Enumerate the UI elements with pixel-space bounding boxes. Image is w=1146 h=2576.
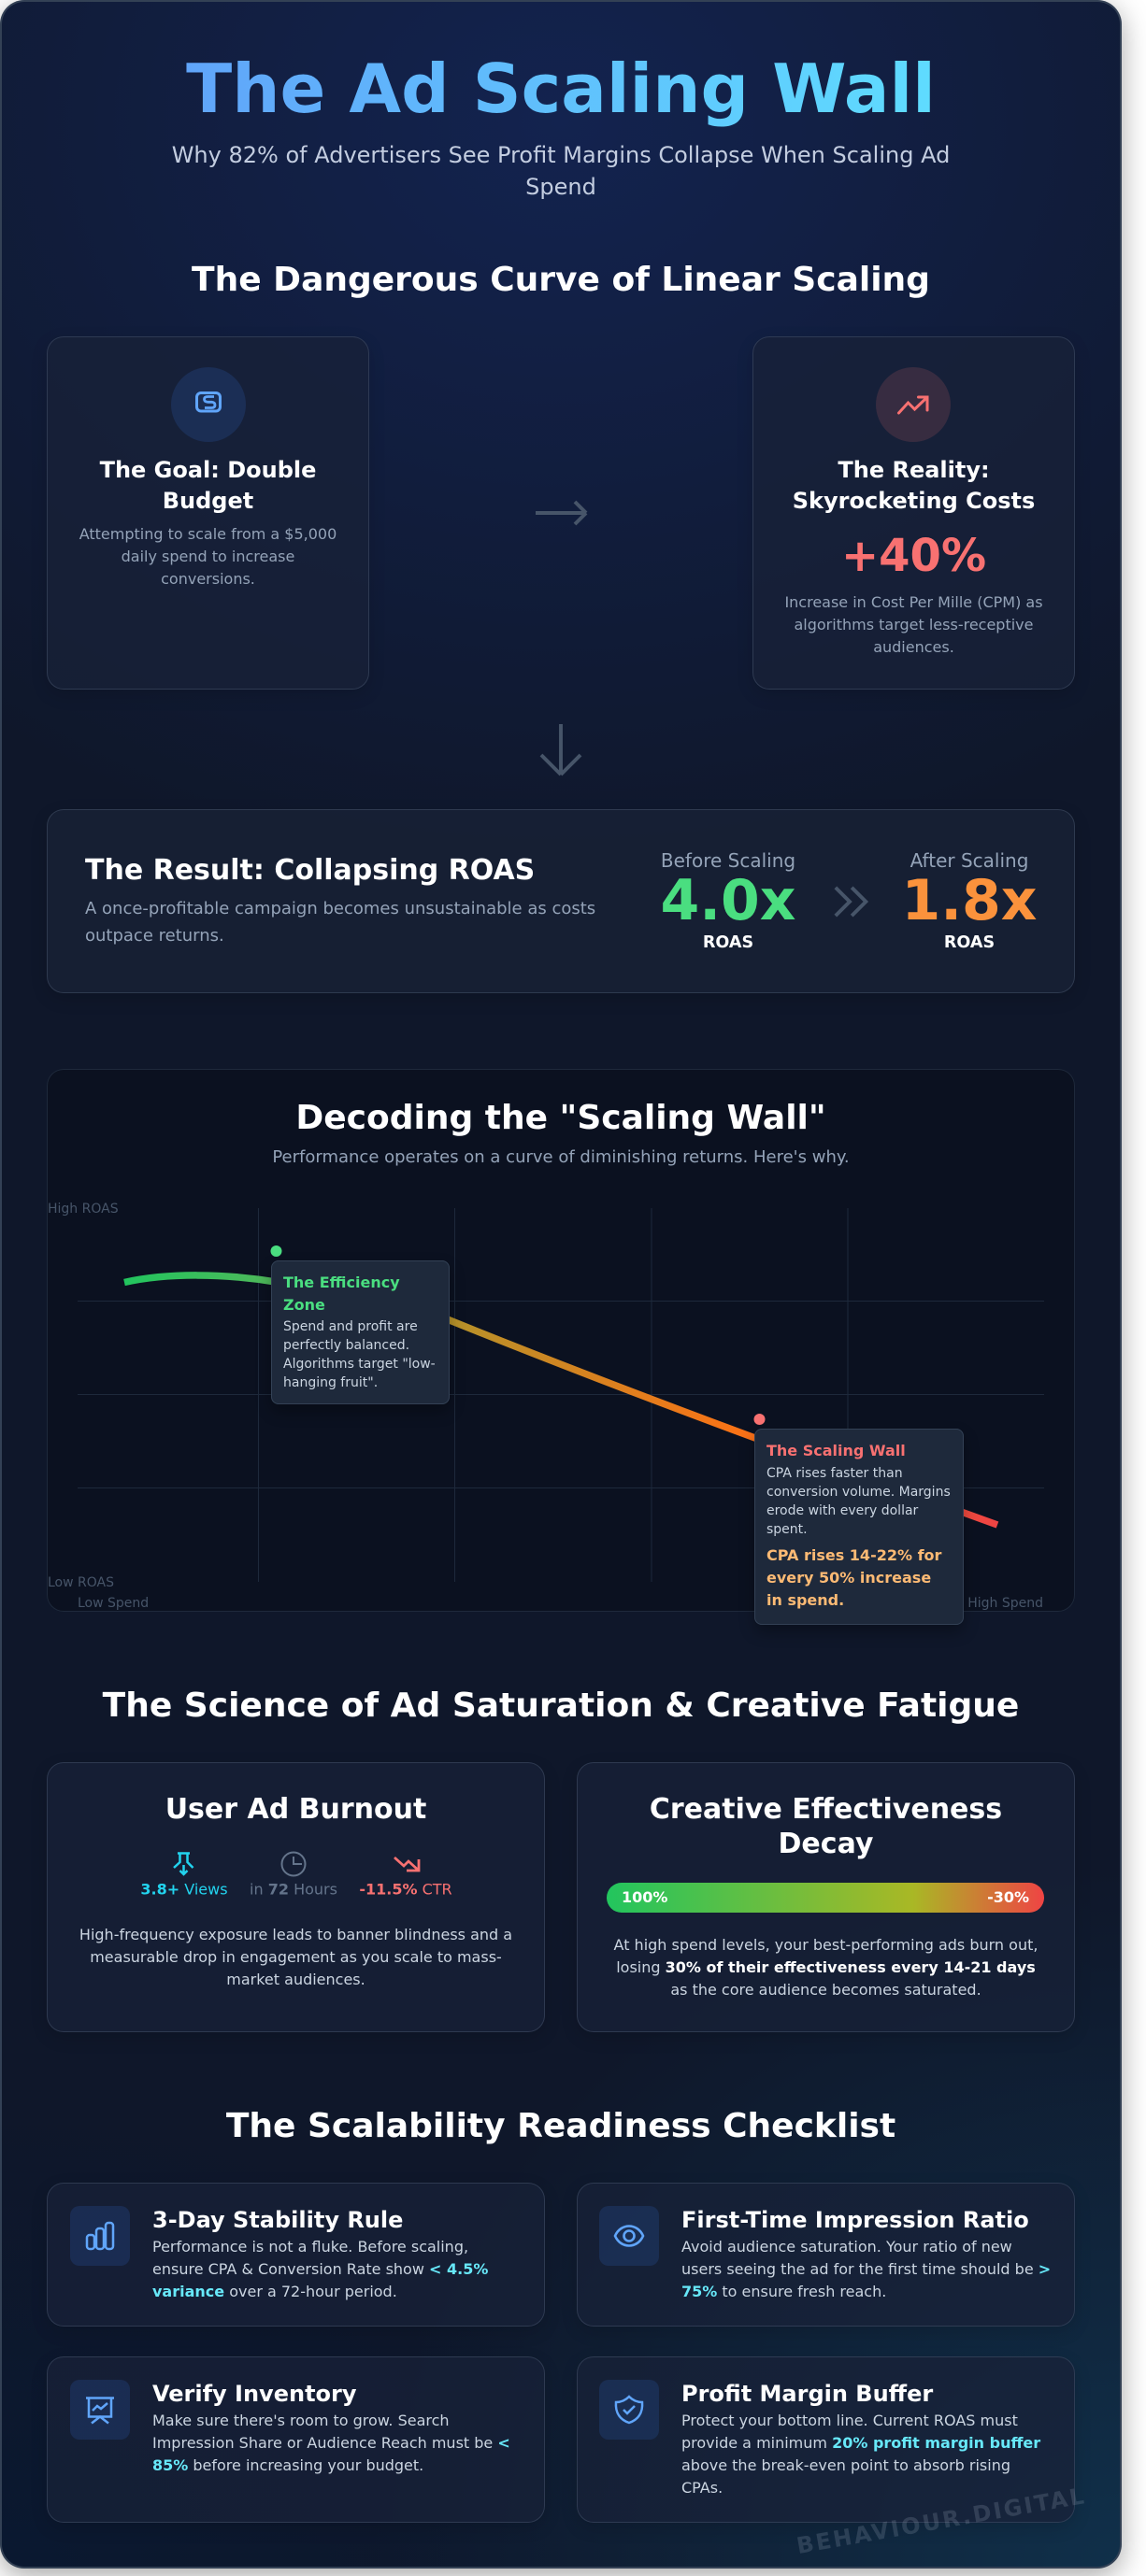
icon: eye bbox=[599, 2206, 659, 2266]
item text bbox=[681, 2412, 1041, 2497]
item text: Make sure there's room to grow. Search bbox=[152, 2412, 450, 2429]
stat: views bbox=[140, 1854, 228, 1899]
item text: ensure CPA & Conversion Rate show < 4.5% bbox=[152, 2260, 488, 2278]
card title: Budget bbox=[163, 488, 253, 514]
callout: the scaling wall: CPA rises faster than bbox=[766, 1466, 903, 1481]
card text bbox=[613, 1936, 1038, 1999]
panel: creative effectiveness decay bbox=[577, 1762, 1075, 2032]
subtitle: Why 82% of Advertisers See Profit Margins Collapse When Scaling Ad bbox=[172, 142, 950, 168]
icon: dollar budget bbox=[171, 367, 246, 442]
card text: Attempting to scale from a $5,000 bbox=[79, 525, 337, 543]
panel: the reality bbox=[752, 336, 1075, 690]
stat: +40%: +40% bbox=[841, 530, 986, 582]
panel: user ad burnout bbox=[47, 1762, 545, 2032]
card text: as the core audience becomes saturated. bbox=[670, 1981, 981, 1999]
callout: the efficiency zone bbox=[271, 1260, 450, 1404]
card text bbox=[79, 525, 337, 588]
chart subtitle: Performance operates on a curve of diminishing returns. Here's why. bbox=[272, 1147, 850, 1167]
panel: collapsing ROAS result bbox=[47, 809, 1075, 993]
burnout stats with icons bbox=[140, 1852, 452, 1899]
card text: algorithms target less-receptive bbox=[794, 616, 1034, 633]
card text: market audiences. bbox=[226, 1971, 365, 1988]
card title bbox=[650, 1793, 1002, 1859]
item title: 3-Day Stability Rule bbox=[152, 2207, 403, 2233]
callout: the efficiency zone: perfectly balanced. bbox=[283, 1338, 409, 1353]
decay gradient bar: 100% bbox=[622, 1888, 667, 1906]
subtitle bbox=[172, 142, 950, 200]
card text: daily spend to increase bbox=[122, 548, 294, 565]
stat: after scaling: After Scaling bbox=[910, 849, 1028, 872]
item text: 75% to ensure fresh reach. bbox=[681, 2283, 886, 2300]
marker: efficiency bbox=[271, 1245, 282, 1257]
callout: the scaling wall: spent. bbox=[766, 1522, 808, 1537]
heading: linear scaling: The Dangerous Curve of Linear Scaling bbox=[192, 261, 930, 299]
item text: variance over a 72-hour period. bbox=[152, 2283, 397, 2300]
card text: Increase in Cost Per Mille (CPM) as bbox=[784, 593, 1043, 611]
callout: the scaling wall bbox=[754, 1429, 964, 1625]
card text: conversions. bbox=[161, 570, 255, 588]
axis labels bbox=[48, 1202, 1043, 1611]
item text: Avoid audience saturation. Your ratio of new bbox=[681, 2238, 1012, 2256]
card text: High-frequency exposure leads to banner blindness and a bbox=[79, 1926, 512, 1943]
stat: before scaling: ROAS bbox=[703, 933, 753, 952]
card text: measurable drop in engagement as you scale to mass- bbox=[90, 1948, 502, 1966]
stat: ctr bbox=[359, 1857, 452, 1899]
stat: before scaling: 4.0x bbox=[660, 868, 796, 933]
callout: the scaling wall: The Scaling Wall bbox=[766, 1442, 906, 1459]
item title: Profit Margin Buffer bbox=[681, 2381, 933, 2407]
subtitle: Spend bbox=[525, 174, 596, 200]
callout: the scaling wall: CPA rises 14-22% for bbox=[766, 1546, 941, 1564]
stat: ctr: -11.5% CTR bbox=[359, 1880, 452, 1899]
item text: above the break-even point to absorb rising bbox=[681, 2456, 1010, 2474]
card text: losing 30% of their effectiveness every 14-21 days bbox=[616, 1958, 1036, 1976]
decay gradient bar: -30% bbox=[987, 1888, 1029, 1906]
item text: 85% before increasing your budget. bbox=[152, 2456, 423, 2474]
card title: User Ad Burnout bbox=[165, 1793, 426, 1826]
panel: the goal bbox=[47, 336, 369, 690]
callout: the efficiency zone: Spend and profit are bbox=[283, 1319, 418, 1334]
icon: bar chart bbox=[70, 2206, 130, 2266]
axis labels: Low ROAS bbox=[48, 1575, 114, 1590]
arrow: right bbox=[536, 501, 587, 525]
item text: Protect your bottom line. Current ROAS must bbox=[681, 2412, 1018, 2429]
stat: before scaling bbox=[660, 849, 796, 952]
axis labels: High ROAS bbox=[48, 1202, 119, 1217]
axis labels: High Spend bbox=[967, 1596, 1043, 1611]
panel: 3-day stability rule bbox=[47, 2183, 545, 2327]
callout: the efficiency zone: Zone bbox=[283, 1296, 325, 1314]
card title bbox=[99, 457, 316, 514]
item title: First-Time Impression Ratio bbox=[681, 2207, 1029, 2233]
item text: users seeing the ad for the first time should be > bbox=[681, 2260, 1051, 2278]
result heading: The Result: Collapsing ROAS bbox=[85, 854, 535, 887]
card title bbox=[793, 457, 1035, 514]
item text: CPAs. bbox=[681, 2479, 723, 2497]
marker: scaling wall bbox=[753, 1414, 765, 1425]
arrow: down bbox=[540, 724, 581, 776]
card title: Skyrocketing Costs bbox=[793, 488, 1035, 514]
callout: the scaling wall: in spend. bbox=[766, 1591, 844, 1609]
callout: the scaling wall: conversion volume. Margins bbox=[766, 1485, 951, 1500]
stat: views: 3.8+ Views bbox=[140, 1880, 228, 1899]
heading: saturation science: The Science of Ad Saturation & Creative Fatigue bbox=[103, 1686, 1019, 1725]
callout: the scaling wall: erode with every dollar bbox=[766, 1503, 918, 1518]
stat: after scaling: ROAS bbox=[944, 933, 995, 952]
icon: shield check bbox=[599, 2380, 659, 2440]
watermark: BEHAVIOUR.DIGITAL bbox=[795, 2483, 1088, 2559]
card title: The Reality: bbox=[838, 457, 990, 483]
stat: after scaling bbox=[901, 849, 1038, 952]
item text: Impression Share or Audience Reach must be < bbox=[152, 2434, 510, 2452]
icon: double chevron bbox=[834, 886, 868, 918]
card text bbox=[784, 593, 1043, 656]
card title: The Goal: Double bbox=[100, 457, 316, 483]
card text: At high spend levels, your best-performing ads burn out, bbox=[614, 1936, 1038, 1954]
item text bbox=[152, 2412, 510, 2474]
icon: rising costs bbox=[876, 367, 951, 442]
axis labels: Low Spend bbox=[78, 1596, 149, 1611]
stat: after scaling: 1.8x bbox=[901, 868, 1038, 933]
panel: first-time impression ratio bbox=[577, 2183, 1075, 2327]
panel: profit margin buffer bbox=[577, 2356, 1075, 2523]
item title: Verify Inventory bbox=[152, 2381, 357, 2407]
title: The Ad Scaling Wall bbox=[186, 50, 936, 128]
curve bbox=[124, 1275, 997, 1525]
item text: Performance is not a fluke. Before scaling, bbox=[152, 2238, 468, 2256]
item text: provide a minimum 20% profit margin buffer bbox=[681, 2434, 1040, 2452]
result text: outpace returns. bbox=[85, 926, 224, 946]
result text: A once-profitable campaign becomes unsustainable as costs bbox=[85, 899, 595, 918]
panel: decoding the scaling wall bbox=[47, 1069, 1075, 1612]
stat: hours: in 72 Hours bbox=[250, 1880, 337, 1899]
item text bbox=[681, 2238, 1051, 2300]
icon: presentation chart bbox=[70, 2380, 130, 2440]
chart heading: Decoding the "Scaling Wall" bbox=[295, 1099, 826, 1137]
stat: hours bbox=[250, 1852, 337, 1899]
panel: verify inventory bbox=[47, 2356, 545, 2523]
card text bbox=[79, 1926, 512, 1988]
callout: the efficiency zone: hanging fruit". bbox=[283, 1375, 378, 1390]
callout: the scaling wall: every 50% increase bbox=[766, 1569, 931, 1587]
result text bbox=[85, 899, 595, 946]
callout: the efficiency zone: Algorithms target "low- bbox=[283, 1357, 436, 1372]
decay gradient bar bbox=[607, 1883, 1044, 1913]
card title: Decay bbox=[779, 1828, 873, 1859]
card title: Creative Effectiveness bbox=[650, 1793, 1002, 1826]
callout: the efficiency zone: The Efficiency bbox=[283, 1274, 400, 1291]
stat: before scaling: Before Scaling bbox=[661, 849, 795, 872]
line chart: ROAS against spend bbox=[48, 1202, 1044, 1611]
card text: audiences. bbox=[873, 638, 954, 656]
heading: readiness checklist: The Scalability Readiness Checklist bbox=[226, 2107, 895, 2145]
item text bbox=[152, 2238, 488, 2300]
